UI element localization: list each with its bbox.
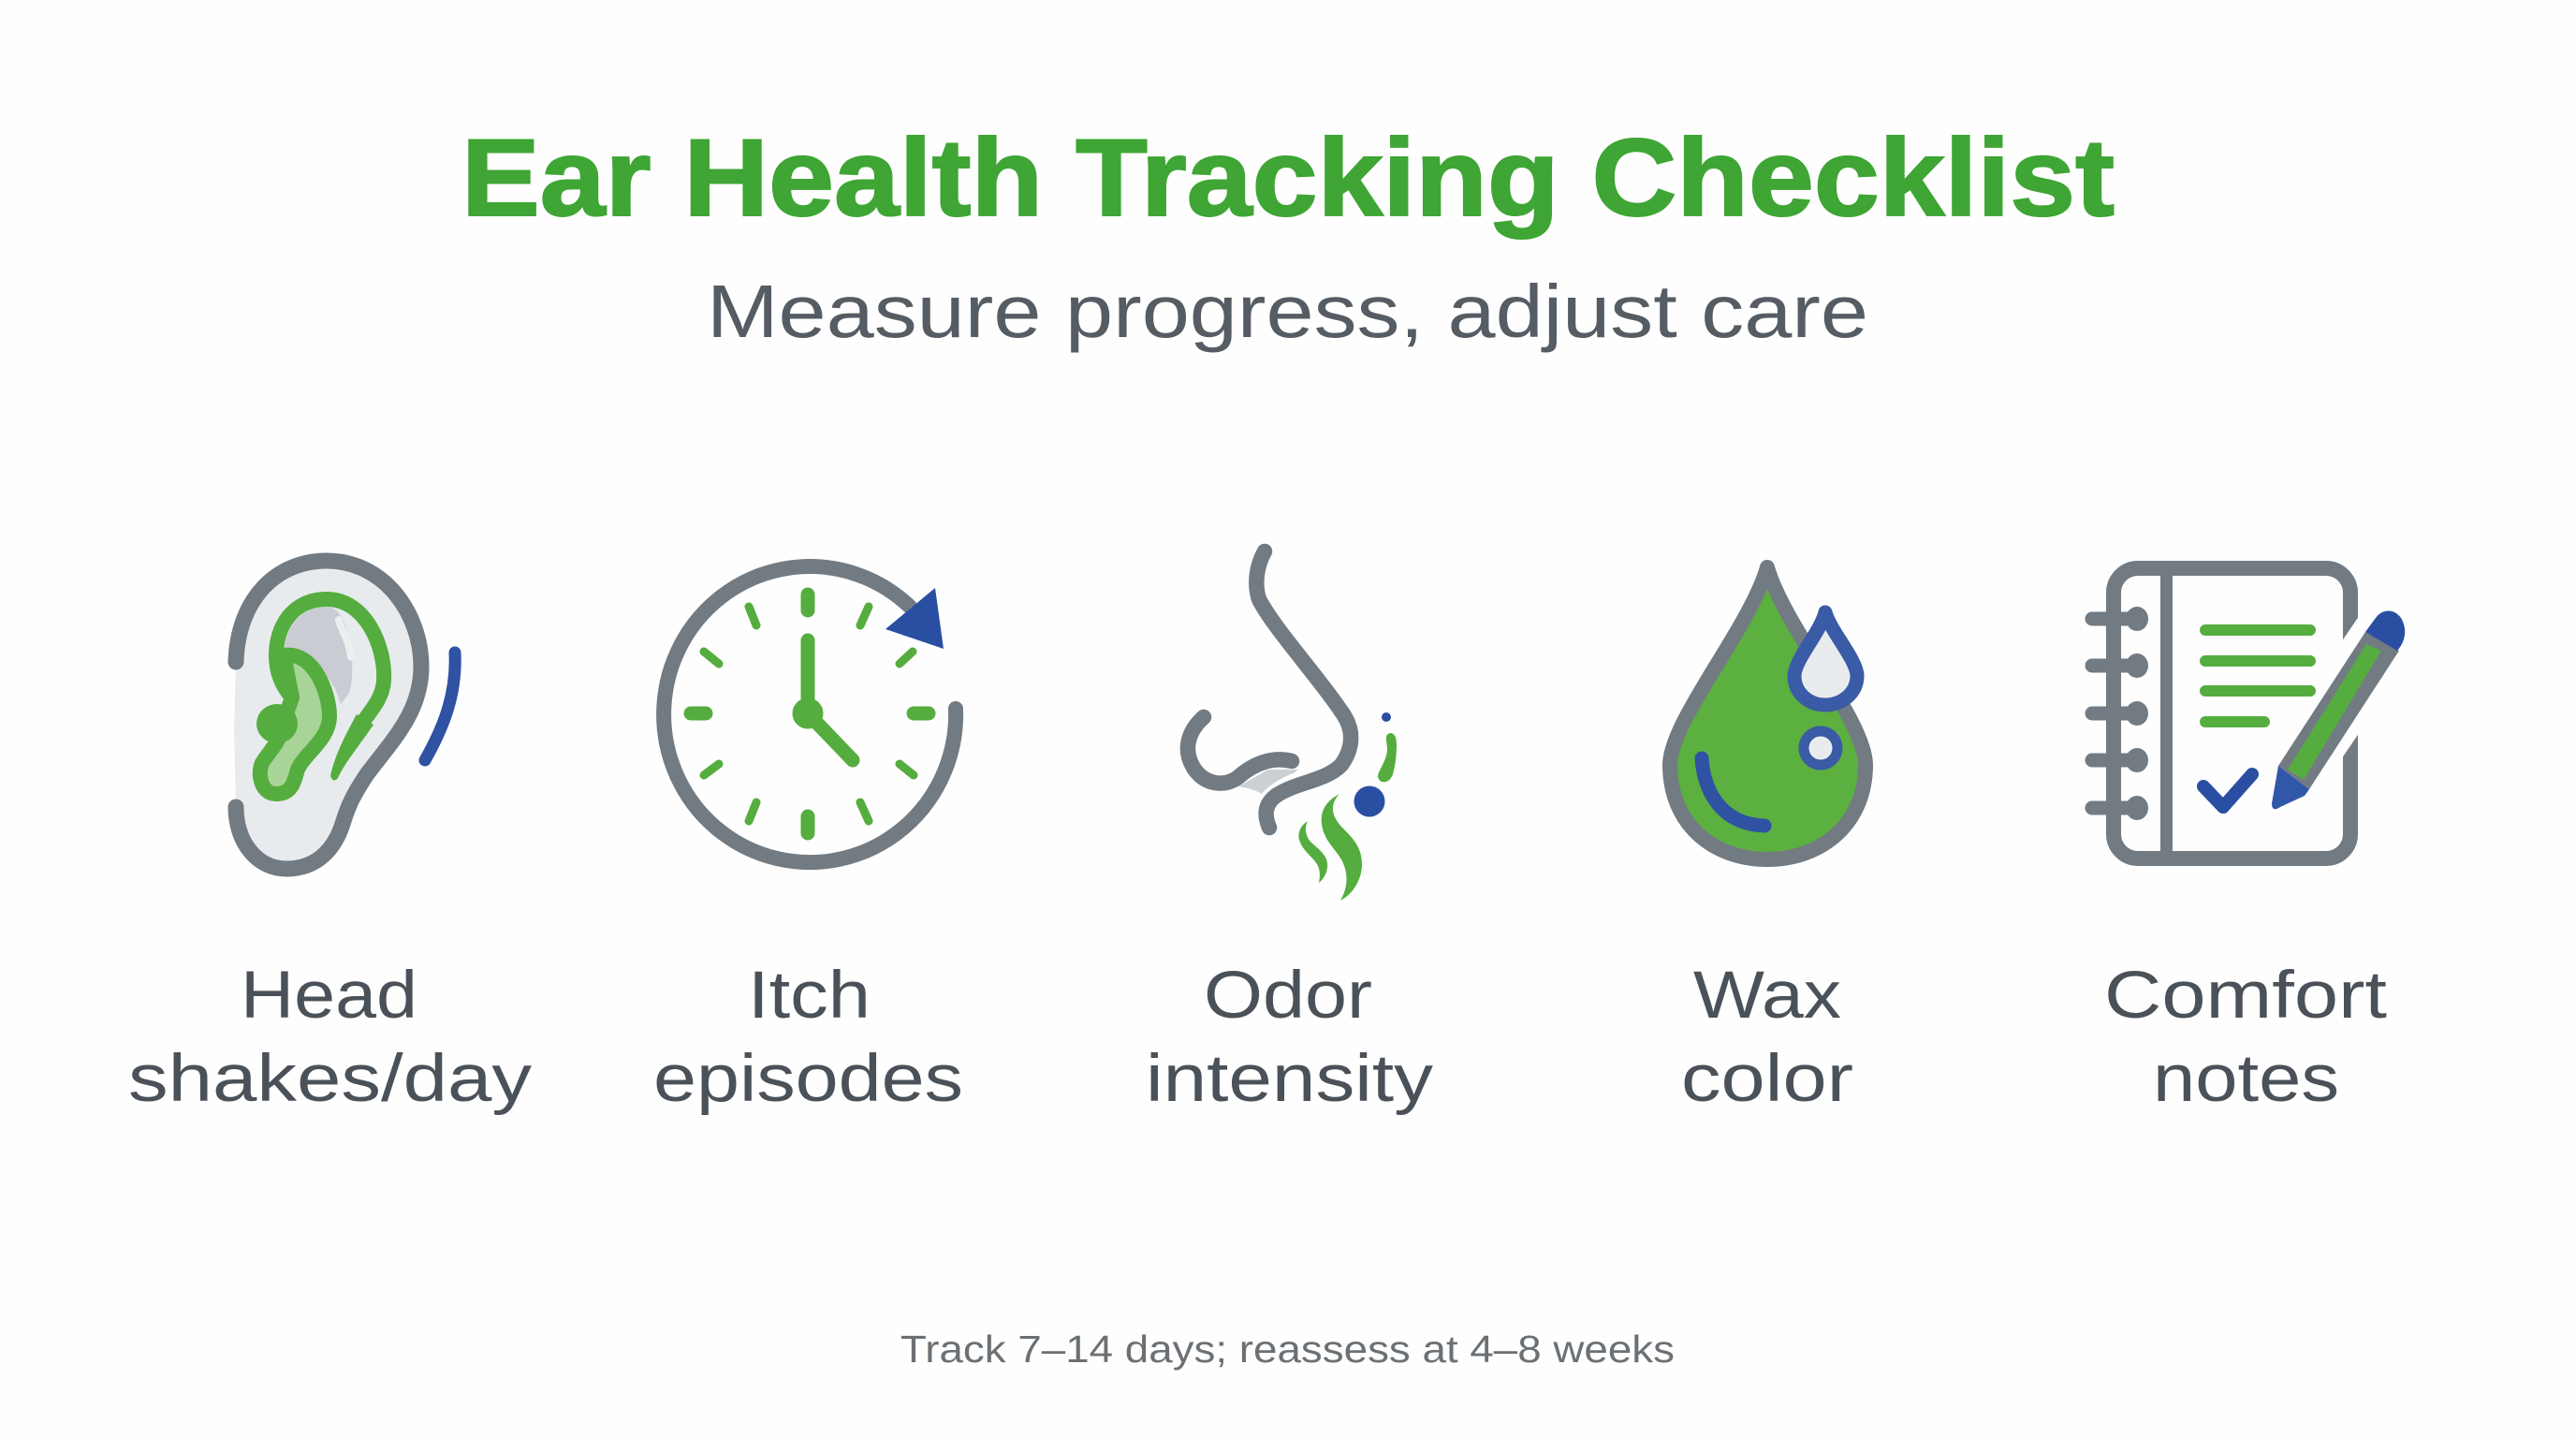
label: odor intensity: intensity: [1146, 1042, 1434, 1116]
label: comfort notes: [2104, 959, 2387, 1116]
pencil tip: [2272, 766, 2309, 809]
odor wave large: [1322, 794, 1362, 901]
label: wax color: color: [1681, 1042, 1853, 1116]
antihelix curve: [260, 655, 329, 794]
icon: ear: [234, 561, 455, 869]
text lines: [2205, 630, 2310, 722]
blue particle large: [1354, 786, 1385, 816]
label: head shakes/day: [128, 959, 533, 1116]
icon: nose: [1188, 551, 1397, 901]
label: head shakes/day: shakes/day: [128, 1042, 533, 1116]
hour ticks: [691, 594, 929, 833]
helix curve: [276, 599, 384, 719]
label: wax color: [1681, 959, 1853, 1116]
ring bubble: [1804, 731, 1837, 765]
label: odor intensity: [1146, 959, 1434, 1116]
column: odor intensity: [1146, 551, 1434, 1116]
title: Ear Health Tracking Checklist: [461, 116, 2115, 239]
icon: clock: [664, 566, 956, 862]
pencil green core: [2288, 644, 2381, 780]
label: itch episodes: Itch: [748, 959, 871, 1033]
label: comfort notes: Comfort: [2104, 959, 2387, 1033]
label: odor intensity: Odor: [1204, 959, 1372, 1033]
subtitle: Measure progress, adjust care: [707, 270, 1868, 353]
nostril shadow: [1238, 770, 1298, 794]
arrow head: [886, 588, 944, 649]
label: itch episodes: episodes: [653, 1042, 963, 1116]
pencil body: [2278, 632, 2399, 789]
spine line: [2160, 568, 2173, 858]
label: itch episodes: [653, 959, 963, 1116]
ear outline: [236, 561, 421, 869]
icon: notebook and pencil: [2092, 568, 2405, 858]
helix tail: [330, 714, 373, 781]
clock hands: [808, 640, 853, 760]
spiral rings: [2092, 607, 2148, 820]
ear concha shadow: [284, 607, 352, 704]
nostril curve: [1188, 717, 1292, 784]
label: comfort notes: notes: [2153, 1042, 2339, 1116]
small drop: [1794, 612, 1857, 705]
motion arc: [425, 653, 455, 760]
pencil gap: [2335, 609, 2364, 768]
column: wax color: [1670, 567, 1866, 1116]
label: wax color: Wax: [1693, 959, 1841, 1033]
check mark: [2203, 774, 2252, 807]
ear highlight: [339, 620, 351, 657]
tragus: [256, 704, 298, 743]
clock centre: [792, 698, 824, 728]
pencil eraser: [2365, 610, 2405, 651]
label: head shakes/day: Head: [241, 959, 417, 1033]
footer note: Track 7–14 days; reassess at 4–8 weeks: [900, 1328, 1675, 1371]
clock ring: [664, 566, 956, 862]
green wisp: [1378, 733, 1397, 782]
odor wave small: [1298, 821, 1327, 883]
smile highlight: [1702, 758, 1764, 826]
column: itch episodes: [653, 566, 963, 1116]
ear fill: [234, 561, 421, 869]
notebook cover: [2114, 568, 2350, 858]
blue particle small: [1382, 712, 1391, 722]
main drop: [1670, 567, 1866, 859]
icon: wax droplet: [1670, 567, 1866, 859]
column: comfort notes: [2092, 568, 2405, 1116]
column: head shakes per day: [128, 561, 533, 1116]
nose bridge: [1256, 551, 1351, 828]
